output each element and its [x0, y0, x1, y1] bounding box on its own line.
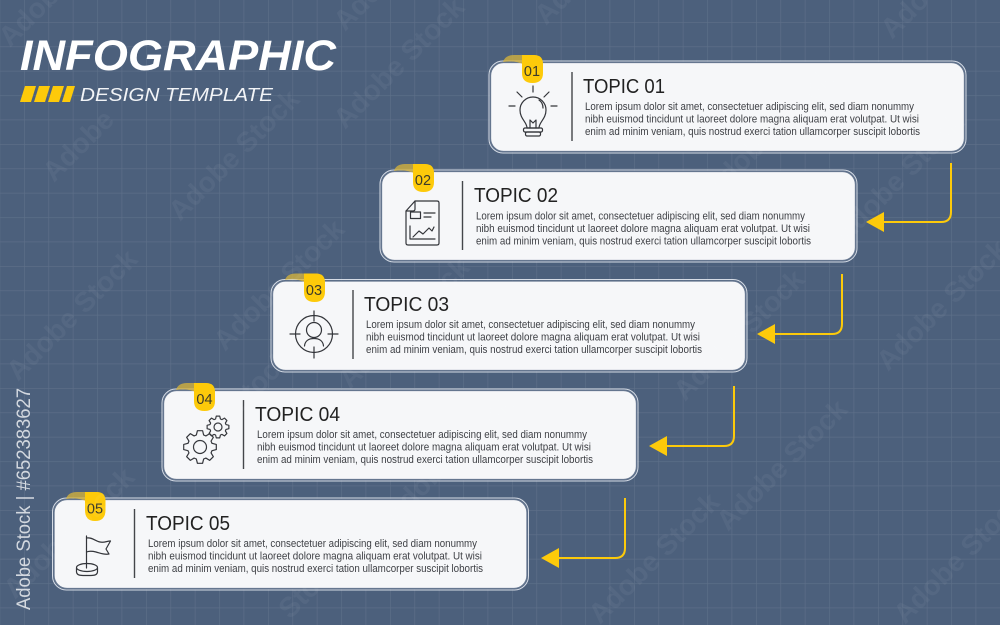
number tab 05 [85, 492, 106, 521]
icon: target person [290, 311, 338, 358]
number tab 02 [413, 164, 434, 192]
arrow: topic 3 to topic 4 [649, 386, 734, 456]
number tab 05: 05 [87, 502, 103, 518]
divider [242, 400, 244, 469]
body text: nibh euismod tincidunt ut laoreet dolore magna aliquam erat volutpat. Ut wisi [257, 442, 591, 454]
number tab 02: 02 [415, 173, 431, 189]
icon: document with chart [406, 201, 439, 245]
watermarks: Adobe Stock [162, 83, 306, 226]
watermarks: Adobe Stock [697, 61, 841, 204]
body text: nibh euismod tincidunt ut laoreet dolore magna aliquam erat volutpat. Ut wisi [148, 550, 482, 562]
body text: enim ad minim veniam, quis nostrud exerci tation ullamcorper suscipit lobortis [366, 344, 702, 356]
watermarks: Adobe [36, 104, 120, 187]
body text: enim ad minim veniam, quis nostrud exerci tation ullamcorper suscipit lobortis [585, 126, 920, 138]
body text: enim ad minim veniam, quis nostrud exerci tation ullamcorper suscipit lobortis [148, 563, 483, 575]
body text [257, 429, 593, 466]
watermarks: Adobe Stock [827, 106, 971, 249]
topic heading: TOPIC 04 [255, 404, 340, 426]
watermarks: Adobe Stock [154, 343, 298, 486]
arrow: topic 1 to topic 2 [866, 163, 951, 232]
body text: Lorem ipsum dolor sit amet, consectetuer adipiscing elit, sed diam nonummy [148, 538, 478, 550]
body text: Lorem ipsum dolor sit amet, consectetuer adipiscing elit, sed diam nonummy [585, 101, 915, 113]
arrow: topic 4 to topic 5 [541, 498, 625, 568]
watermarks: Adobe Stock [377, 386, 521, 529]
divider [352, 290, 354, 359]
body text: Lorem ipsum dolor sit amet, consectetuer adipiscing elit, sed diam nonummy [257, 429, 588, 441]
stock id sidebar text: Adobe Stock | #652383627 [14, 388, 35, 610]
topic heading: TOPIC 03 [364, 294, 449, 316]
body text: enim ad minim veniam, quis nostrud exerci tation ullamcorper suscipit lobortis [476, 236, 811, 248]
body text: nibh euismod tincidunt ut laoreet dolore magna aliquam erat volutpat. Ut wisi [585, 114, 919, 126]
body text [476, 210, 811, 248]
topic heading: TOPIC 05 [146, 513, 230, 535]
topic heading: TOPIC 02 [474, 185, 558, 207]
body text: nibh euismod tincidunt ut laoreet dolore magna aliquam erat volutpat. Ut wisi [476, 223, 810, 235]
watermarks: Adobe Stock [710, 393, 854, 536]
icon: light bulb [509, 86, 557, 136]
watermarks: Adobe Stock [582, 486, 726, 625]
body text [585, 101, 920, 138]
icon: gears [184, 416, 229, 463]
panel: topic 04 [162, 383, 638, 481]
icon: yellow stripes [20, 86, 75, 102]
arrow: topic 2 to topic 3 [757, 274, 842, 344]
watermarks: Adobe Stock [207, 213, 351, 356]
panel: topic 01 [489, 55, 966, 153]
divider [462, 181, 464, 250]
divider [571, 72, 573, 141]
title [20, 32, 337, 105]
number tab 01: 01 [524, 64, 540, 80]
body text: enim ad minim veniam, quis nostrud exerci tation ullamcorper suscipit lobortis [257, 454, 593, 466]
topic heading: TOPIC 01 [583, 76, 665, 98]
watermarks: Adobe Stock [667, 263, 811, 406]
watermarks: Stock [272, 548, 348, 624]
panel: topic 02 [380, 164, 857, 262]
watermarks: Adobe Stock [332, 251, 476, 394]
number tab 04 [194, 383, 215, 411]
watermarks: Adobe Stock [0, 461, 141, 604]
watermarks: Adobe Stock [0, 243, 144, 386]
panel: topic 03 [271, 274, 747, 372]
number tab 03 [304, 274, 325, 302]
icon: flag on base [76, 536, 110, 576]
body text: nibh euismod tincidunt ut laoreet dolore magna aliquam erat volutpat. Ut wisi [366, 332, 700, 344]
number tab 01 [522, 55, 543, 83]
panel: topic 05 [52, 492, 528, 590]
divider [134, 509, 136, 578]
subheading: design template: DESIGN TEMPLATE [80, 85, 274, 105]
body text: Lorem ipsum dolor sit amet, consectetuer adipiscing elit, sed diam nonummy [476, 210, 806, 222]
heading: infographic: INFOGRAPHIC [20, 32, 337, 80]
body text [366, 319, 702, 356]
body text: Lorem ipsum dolor sit amet, consectetuer adipiscing elit, sed diam nonummy [366, 319, 696, 331]
number tab 03: 03 [306, 283, 322, 299]
number tab 04: 04 [196, 392, 213, 408]
body text [148, 538, 483, 575]
